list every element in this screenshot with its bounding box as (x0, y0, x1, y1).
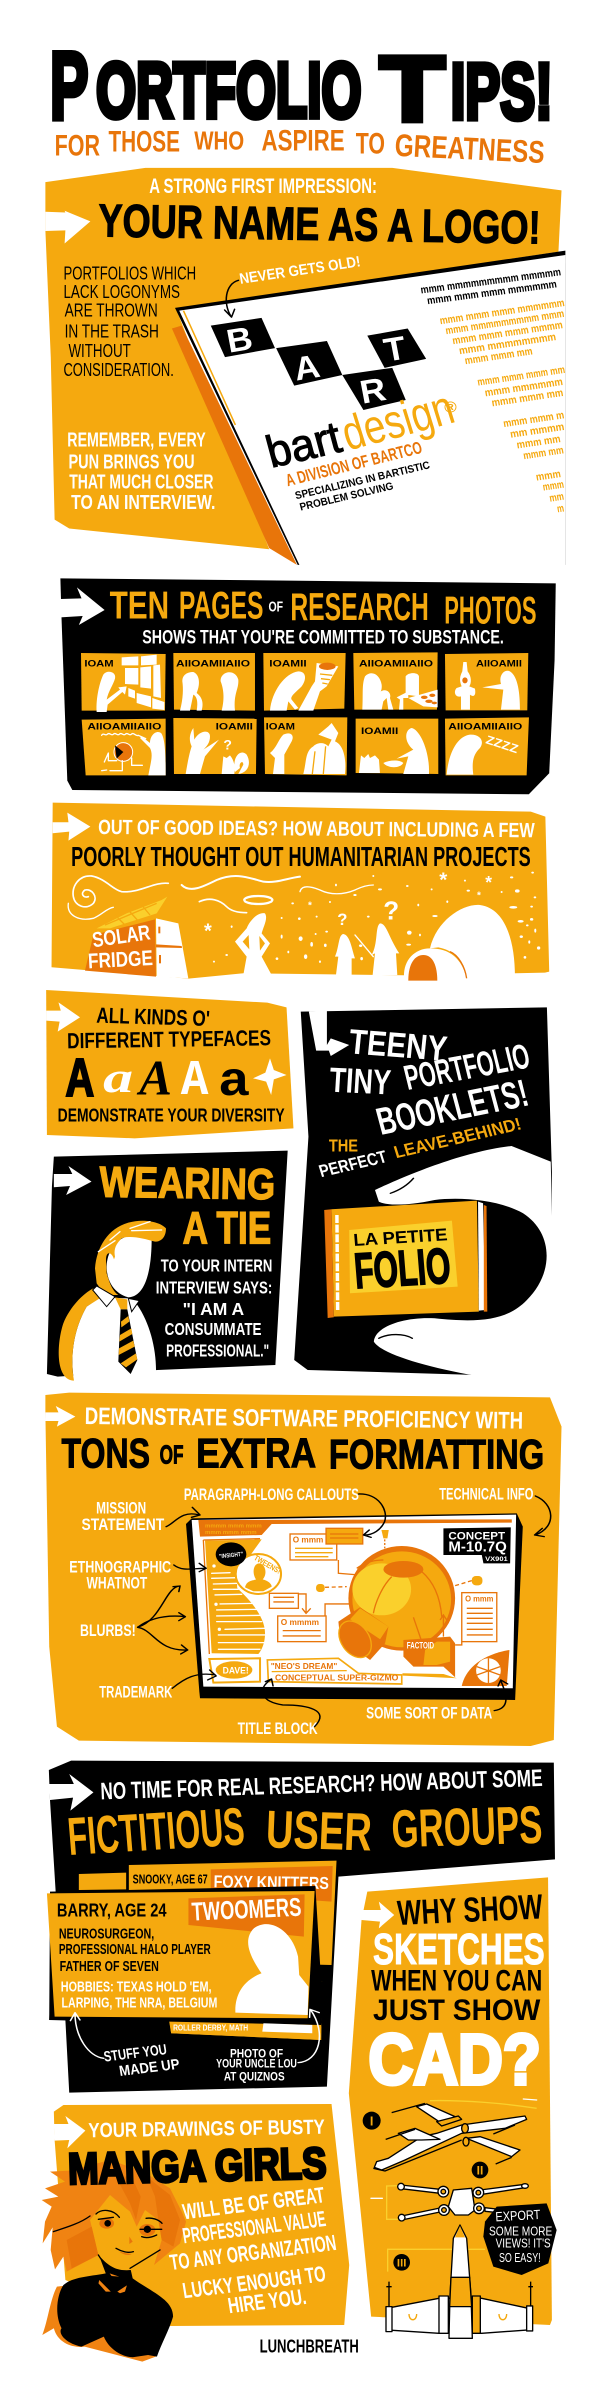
title: P (50, 33, 88, 140)
solar fridge (85, 897, 188, 978)
type samples: A (137, 1050, 172, 1106)
booklet: FOLIO (352, 1238, 453, 1299)
photo: giraffe and group: IOAM (266, 722, 295, 732)
photo: squirrel question (173, 718, 257, 774)
subtitle: THOSE (108, 124, 180, 158)
callout labels: SOME SORT OF DATA (366, 1703, 492, 1722)
page body squiggles: mmm mmm mmm mmmm (452, 319, 564, 347)
logo: bartdesign wordmark: bart (261, 412, 347, 477)
text block: logonyms: CONSIDERATION. (63, 361, 174, 381)
text block: logonyms (63, 264, 196, 381)
text block: logonyms: IN THE TRASH (65, 322, 159, 342)
type samples (65, 1049, 287, 1110)
speech bubble: export more views: SO EASY! (499, 2250, 541, 2265)
heading: teeny tiny portfolio booklets (328, 1023, 534, 1143)
photo: feeding group: IOAMII (361, 726, 398, 736)
annotation: photo of your uncle: AT QUIZNOS (224, 2070, 285, 2083)
concept board: mmm mmm mmm (205, 1530, 257, 1536)
arrow (54, 1166, 92, 1195)
photo: squirrel question: ? (223, 737, 232, 753)
text: the perfect leave-behind: LEAVE-BEHIND! (391, 1114, 524, 1162)
logo: bartdesign wordmark (261, 380, 460, 477)
figure: man in tie (59, 1221, 166, 1381)
panel: extra formatting (45, 1393, 562, 1746)
arrow (309, 1010, 349, 1056)
concept board: mmmm mmm mmm (205, 1523, 262, 1529)
heading: manga girls: MANGA GIRLS (67, 2139, 327, 2194)
text block: pun: THAT MUCH CLOSER (69, 471, 213, 493)
concept board: CONCEPTUAL SUPER-GIZMO (275, 1673, 398, 1682)
callout labels: STATEMENT (82, 1515, 164, 1534)
igloo (404, 905, 515, 981)
heading: ten pages of research photos (110, 583, 537, 632)
x-wing: top view (386, 2225, 533, 2338)
user card: Barry: HOBBIES: TEXAS HOLD 'EM, (61, 1980, 212, 1995)
callout labels: TECHNICAL INFO (439, 1485, 533, 1503)
heading: ten pages of research photos: RESEARCH (290, 585, 429, 628)
arrow (46, 1002, 80, 1032)
back card remnant (169, 2022, 321, 2040)
photo: presenting a chart (82, 719, 166, 775)
text: to your intern: CONSUMMATE (165, 1319, 262, 1339)
arrow (49, 1774, 93, 1811)
text block: logonyms: LACK LOGONYMS (63, 283, 180, 303)
text block: pun: TO AN INTERVIEW. (71, 492, 215, 514)
signature: LUNCHBREATH (260, 2337, 359, 2357)
page body squiggles: mmm mmm mmm mmmmmm (439, 297, 566, 327)
page body squiggles: mmm mmm mm (491, 387, 564, 409)
heading: fictitious user groups: USER (265, 1800, 373, 1863)
page body squiggles: mmm mm (522, 445, 565, 462)
snow specks: * (477, 891, 481, 902)
booklet (324, 1201, 487, 1318)
arrow (362, 1902, 394, 1928)
type samples: A (65, 1049, 94, 1108)
hair (42, 2160, 186, 2272)
logo: bartdesign wordmark: ® (444, 399, 457, 416)
callout labels: PARAGRAPH-LONG CALLOUTS (184, 1485, 359, 1504)
snow specks (204, 869, 540, 963)
arrow (53, 813, 90, 841)
heading: CAD: CAD? (368, 2020, 541, 2100)
x-wing: three-quarter view (373, 2103, 527, 2171)
panel: typefaces (46, 990, 293, 1138)
concept board (186, 1513, 523, 1700)
finger creases (379, 1178, 413, 1338)
section: extra formatting (45, 1393, 562, 1746)
section: research photos and humanitarian headings (52, 578, 556, 979)
figures: ? (383, 895, 399, 925)
user card: Barry: FATHER OF SEVEN (60, 1959, 159, 1975)
type samples: a (103, 1054, 133, 1102)
user card: Foxy Knitters: SNOOKY, AGE 67 (133, 1872, 208, 1887)
snow specks: * (204, 920, 212, 942)
type samples: a (219, 1052, 249, 1106)
panel: research photos (60, 578, 556, 794)
title: ORTFOLIO (96, 48, 362, 134)
photo: candle: AIIOAMII (476, 658, 522, 668)
photo: two people: AIIOAMIIAIIO (176, 658, 250, 668)
logo: BART blocks (211, 318, 426, 411)
back card remnant: ROLLER DERBY, MATH (173, 2023, 248, 2032)
type samples: A (181, 1053, 209, 1110)
text: to your intern: "I AM A (183, 1299, 245, 1319)
text block: pun (67, 429, 215, 514)
callout labels: WHATNOT (87, 1573, 147, 1592)
heading: ten pages of research photos: TEN (110, 583, 169, 627)
figures (235, 895, 399, 975)
numbered badges: III (397, 2258, 406, 2270)
concept board: "NEO'S DREAM" (271, 1661, 337, 1671)
page body squiggles (420, 267, 566, 515)
speech bubble: export more views: EXPORT (495, 2207, 541, 2224)
text block: specializing: PROBLEM SOLVING (299, 481, 395, 513)
heading: tons of extra formatting: EXTRA (196, 1429, 316, 1477)
text block: pun: REMEMBER, EVERY (67, 429, 206, 451)
text: will be of great: PROFESSIONAL VALUE (181, 2207, 328, 2249)
photo grid (81, 652, 529, 775)
page body squiggles: m (556, 503, 565, 515)
callout labels: MISSION (96, 1499, 146, 1517)
page body squiggles: mmm mmm mmm mmmmmm (426, 279, 558, 307)
text: will be of great (168, 2183, 338, 2319)
concept board: "INSIGHT" (219, 1552, 244, 1560)
page body squiggles: mmm (542, 479, 565, 494)
snow specks: * (485, 872, 492, 892)
panel: fictitious user groups (49, 1761, 555, 2093)
photo: sleeping: AIIOAMIIAIIO (448, 722, 522, 732)
logo: BART blocks: R (357, 371, 389, 411)
heading: tons of extra formatting: TONS (62, 1429, 150, 1477)
user card: Foxy Knitters (49, 1861, 337, 2040)
page body squiggles: mmm mmmmmm (484, 376, 564, 399)
portfolio page sheet (179, 255, 565, 568)
photo: squirrel question: IOAMII (216, 722, 253, 732)
heading: when you can just show (371, 1964, 542, 2026)
text block: division: A DIVISION OF BARTCO (283, 438, 424, 490)
photo: candle (445, 653, 528, 710)
subtitle: TO (356, 127, 385, 160)
concept board: DAVE! (223, 1665, 249, 1675)
panel: booklets (294, 1007, 552, 1377)
photo: pointing at wall (81, 653, 166, 712)
annotation: stuff you made up (70, 2013, 181, 2080)
booklet: LA PETITE (353, 1225, 448, 1250)
x-wing views (363, 2099, 557, 2338)
page accent line (183, 311, 235, 425)
speech bubble: export more views: VIEWS! IT'S (496, 2236, 551, 2251)
portfolio page (175, 251, 565, 565)
callout: never gets old (225, 254, 362, 317)
solar fridge: FRIDGE (87, 946, 153, 973)
concept board: M-10.7Q (448, 1539, 507, 1555)
hand (374, 1146, 556, 1378)
heading: teeny tiny portfolio booklets: TEENY (347, 1023, 449, 1069)
title (50, 33, 553, 141)
heading: wearing a tie (99, 1158, 276, 1253)
photo: table of snacks (353, 652, 438, 710)
photo: sleeping: ZZZZ (484, 733, 520, 756)
subtitle (55, 124, 546, 170)
text block: logonyms: ARE THROWN (65, 301, 158, 322)
user card: Barry: BARRY, AGE 24 (57, 1901, 167, 1921)
logo: BART blocks: T (381, 330, 409, 369)
snow specks: * (439, 869, 448, 892)
arrow (60, 587, 105, 625)
user card: Barry: LARPING, THE NRA, BELGIUM (62, 1995, 217, 2011)
heading: when you can just show: JUST SHOW (373, 1993, 540, 2026)
annotation: stuff you made up: MADE UP (118, 2057, 181, 2080)
photo: giraffe and group (264, 717, 347, 775)
figures: ? (337, 910, 347, 929)
logo: BART blocks: B (224, 320, 256, 360)
subtitle: WHO (194, 126, 244, 155)
page body squiggles: mm (549, 491, 565, 505)
x-wing: front view (398, 2183, 528, 2221)
concept board: O mmmm (281, 1617, 319, 1627)
annotation: stuff you made up: STUFF YOU (103, 2042, 168, 2065)
text: demonstrate diversity: DEMONSTRATE YOUR DIVERSITY (58, 1106, 285, 1126)
subtitle: GREATNESS (394, 127, 546, 170)
heading: fictitious user groups: FICTITIOUS (65, 1797, 247, 1867)
panel: wearing a tie (47, 1151, 288, 1377)
heading: all kinds (67, 1003, 271, 1054)
text: the perfect leave-behind: THE (329, 1136, 358, 1155)
photo: two people (173, 653, 255, 711)
concept board: O mmm (293, 1535, 324, 1545)
user card: Barry: PROFESSIONAL HALO PLAYER (59, 1942, 211, 1958)
numbered badges: I (370, 2114, 373, 2128)
page body squiggles: mmm mmmmmmmm (458, 331, 557, 357)
page body squiggles: mmm mmmmmmmmm mmmmm (420, 267, 562, 296)
user card: Barry: NEUROSURGEON, (59, 1926, 154, 1942)
text: to your intern: INTERVIEW SAYS: (156, 1278, 272, 1297)
text: to your intern (156, 1256, 272, 1360)
text: to your intern: TO YOUR INTERN (161, 1256, 272, 1275)
photo: feeding group (356, 719, 438, 774)
annotation: photo of your uncle (216, 2009, 319, 2083)
speech bubble: export more views: SOME MORE (489, 2223, 552, 2238)
panel: manga girls (54, 2104, 349, 2326)
subtitle: ASPIRE (262, 124, 345, 157)
arrow (54, 2116, 85, 2148)
annotation: photo of your uncle: YOUR UNCLE LOU (216, 2056, 297, 2070)
photo: table of snacks: AIIOAMIIAIIO (359, 658, 433, 668)
text block: pun: PUN BRINGS YOU (68, 451, 195, 473)
callout labels: TRADEMARK (99, 1682, 172, 1701)
text block: logonyms: WITHOUT (68, 342, 131, 362)
speech bubble: export more views (483, 2203, 557, 2275)
text block: logonyms: PORTFOLIOS WHICH (63, 264, 196, 284)
heading: all kinds: ALL KINDS O' (96, 1003, 210, 1032)
concept board: TWEENS! (252, 1553, 282, 1576)
callout labels: BLURBS! (80, 1621, 136, 1640)
subtitle: FOR (55, 129, 100, 162)
text: the perfect leave-behind (316, 1114, 524, 1181)
heading: tons of extra formatting (62, 1429, 544, 1478)
page body squiggles: mmm mmm mm (464, 346, 534, 367)
heading: ten pages of research photos: PAGES (179, 583, 263, 627)
heading: teeny tiny portfolio booklets: TINY (328, 1061, 392, 1103)
heading: all kinds: DIFFERENT TYPEFACES (67, 1026, 271, 1054)
panel: why show sketches (349, 1877, 552, 2325)
text: to your intern: PROFESSIONAL." (166, 1341, 269, 1360)
page body squiggles: mmm mm (516, 434, 562, 451)
concept board: CONCEPT (448, 1530, 506, 1542)
figure: manga girl face (53, 2210, 162, 2271)
text block: specializing: SPECIALIZING IN BARTISTIC (294, 460, 431, 502)
photo: pointing at wall: IOAM (84, 658, 114, 668)
user card: Barry: TWOOMERS (191, 1893, 302, 1926)
numbered badges (363, 2112, 488, 2271)
section: manga girls (42, 2104, 359, 2362)
photo: presenting a chart: AIIOAMIIAIIO (87, 722, 161, 732)
heading: wearing a tie: WEARING (99, 1158, 276, 1209)
heading: ten pages of research photos: OF (268, 599, 283, 615)
photo: sleeping (445, 717, 529, 775)
heading: strong first impression: A STRONG FIRST IMPRESSION: (149, 174, 377, 198)
scene: solar fridge and igloo (68, 869, 540, 981)
page body squiggles: mm mmmm (509, 421, 565, 441)
text: will be of great: TO ANY ORGANIZATION (168, 2230, 338, 2275)
heading: tons of extra formatting: OF (160, 1440, 183, 1469)
heading: wearing a tie: A TIE (183, 1203, 271, 1253)
text: the perfect leave-behind: PERFECT (316, 1146, 390, 1181)
annotation: photo of your uncle: PHOTO OF (230, 2046, 283, 2060)
guide lines (371, 2099, 537, 2272)
title: T (380, 38, 445, 141)
snow specks: * (308, 901, 312, 912)
logo: BART blocks: A (291, 348, 323, 388)
arrow (45, 1406, 75, 1427)
page shadow (172, 326, 297, 565)
page body squiggles: mmm mmm mmm mm (477, 364, 566, 389)
arrow (45, 211, 90, 244)
text: will be of great: WILL BE OF GREAT (181, 2183, 327, 2225)
photo: telescope (263, 653, 346, 711)
heading: fictitious user groups (65, 1796, 543, 1867)
section: typefaces, booklets, tie (46, 990, 556, 1378)
wing insignia (409, 2314, 507, 2320)
concept board: O mmm (465, 1593, 494, 1603)
solar fridge: SOLAR (91, 920, 152, 952)
text: will be of great: LUCKY ENOUGH TO (181, 2262, 328, 2304)
panel: logo tip background (45, 168, 562, 549)
logo: bartdesign wordmark: design (335, 380, 460, 461)
user card: Barry (47, 1891, 315, 2018)
page body squiggles: mmm mmm m (502, 410, 565, 430)
concept board: VX901 (485, 1556, 508, 1563)
user card: Foxy Knitters: FOXY KNITTERS (213, 1872, 329, 1893)
callout arrows (138, 1494, 551, 1727)
wind swirls (68, 876, 373, 919)
callout: never gets old: NEVER GETS OLD! (238, 254, 362, 288)
concept board: FACTOID (407, 1641, 434, 1651)
section: user groups and CAD (47, 1761, 555, 2325)
page body squiggles: mmm (535, 468, 562, 484)
section: header and logo tip (45, 33, 566, 568)
callout labels: ETHNOGRAPHIC (69, 1558, 171, 1576)
panel: humanitarian projects (52, 803, 549, 979)
text block: specializing (294, 460, 431, 513)
figure: manga girl body (42, 2256, 173, 2362)
gizmo (332, 1546, 455, 1664)
photo: telescope: IOAMII (269, 658, 307, 668)
numbered badges: II (477, 2164, 483, 2178)
callout labels (69, 1485, 533, 1738)
callout labels: TITLE BLOCK (238, 1719, 318, 1738)
heading: your drawings of busty: YOUR DRAWINGS OF BUSTY (88, 2115, 325, 2142)
text: will be of great: HIRE YOU. (226, 2285, 308, 2319)
